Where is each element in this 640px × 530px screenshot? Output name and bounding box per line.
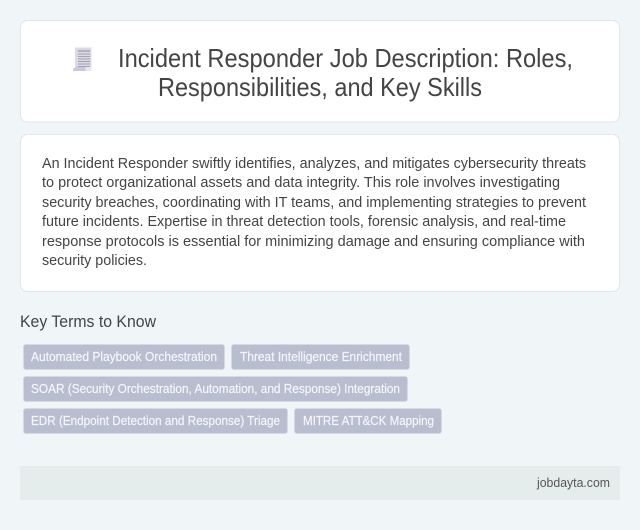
tag: soar integration: SOAR (Security Orchestration, Automation, and Response) Integration bbox=[31, 382, 400, 396]
panel: header bbox=[20, 20, 620, 122]
tag: threat intelligence enrichment bbox=[232, 344, 410, 370]
tag: edr triage: EDR (Endpoint Detection and Response) Triage bbox=[31, 414, 280, 428]
description text: An Incident Responder swiftly identifies, analyzes, and mitigates cybersecurity threats bbox=[42, 155, 586, 172]
description text: security breaches, coordinating with IT teams, and implementing strategies to prevent bbox=[42, 194, 587, 211]
panel: description bbox=[20, 134, 620, 292]
tag: automated playbook orchestration: Automated Playbook Orchestration bbox=[31, 350, 217, 364]
description text: response protocols is essential for minimizing damage and ensuring compliance with bbox=[42, 233, 585, 250]
tag: threat intelligence enrichment: Threat Intelligence Enrichment bbox=[240, 350, 403, 364]
tag: mitre att&ck mapping: MITRE ATT&CK Mapping bbox=[303, 414, 434, 428]
description text: future incidents. Expertise in threat detection tools, forensic analysis, and real-time bbox=[42, 213, 566, 230]
footer bar: jobdayta.com bbox=[536, 476, 610, 490]
icon: document receipt bbox=[73, 48, 92, 71]
description text bbox=[42, 155, 587, 269]
tag: soar integration bbox=[24, 376, 408, 402]
heading: key terms: Key Terms to Know bbox=[20, 313, 156, 331]
title: Responsibilities, and Key Skills bbox=[158, 72, 482, 102]
tag: automated playbook orchestration bbox=[24, 344, 224, 370]
description text: to protect organizational assets and data integrity. This role involves investigating bbox=[42, 174, 560, 191]
title: Incident Responder Job Description: Roles, bbox=[118, 43, 573, 73]
description text: security policies. bbox=[42, 252, 147, 269]
title bbox=[118, 43, 573, 102]
footer bar bbox=[20, 466, 620, 500]
tag: edr triage bbox=[24, 408, 288, 434]
tag: mitre att&ck mapping bbox=[294, 408, 442, 434]
